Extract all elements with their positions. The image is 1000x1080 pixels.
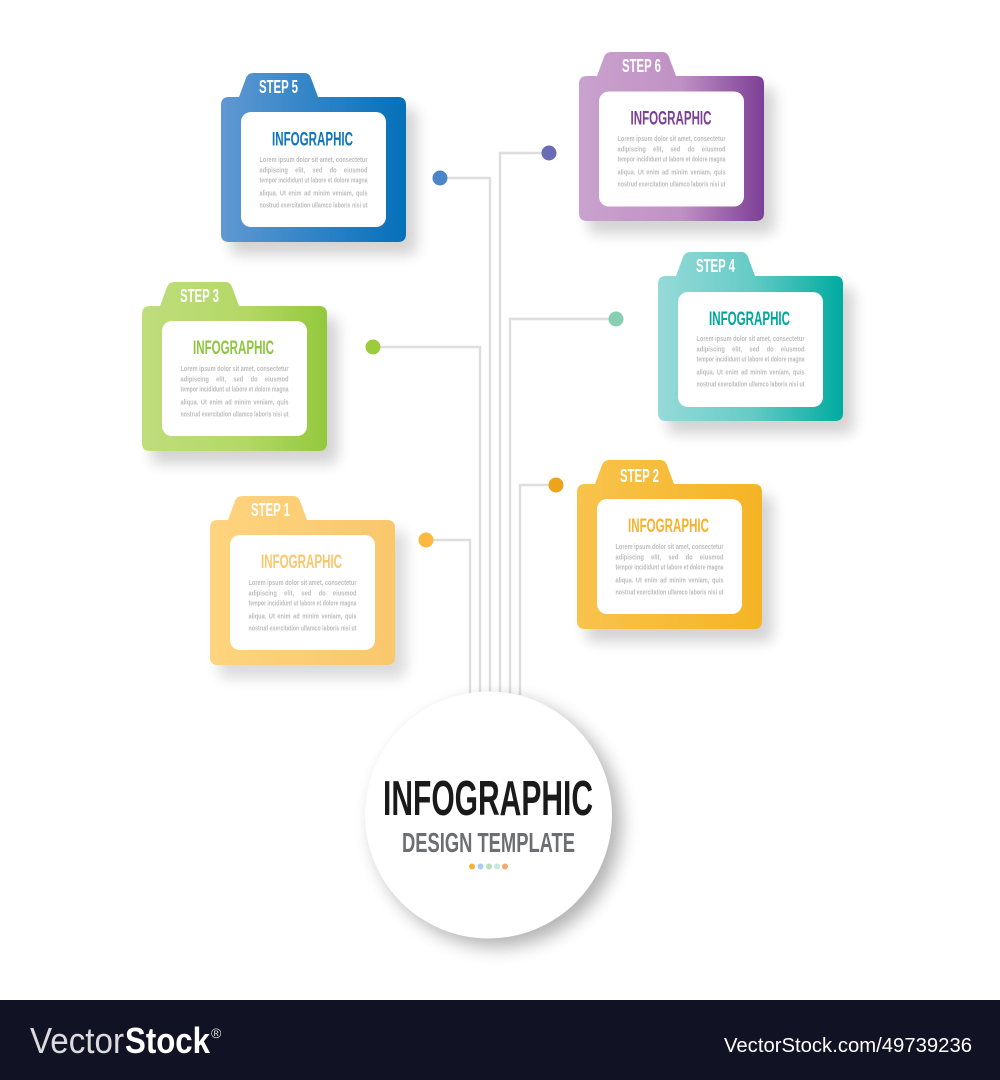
body text bbox=[180, 366, 289, 418]
footer logo: Vector bbox=[30, 1020, 124, 1061]
panel: step 6 bbox=[579, 52, 775, 234]
panel: step 4 bbox=[658, 252, 854, 434]
body text: adipiscing elit, sed do eiusmod bbox=[618, 146, 726, 154]
tab label: STEP 3 bbox=[180, 286, 219, 306]
heading: INFOGRAPHIC bbox=[628, 516, 709, 537]
panel: step 2 bbox=[577, 460, 773, 642]
tab label: STEP 2 bbox=[620, 466, 659, 486]
body text bbox=[260, 157, 368, 210]
footer logo: Stock bbox=[125, 1020, 211, 1061]
tab label: STEP 4 bbox=[696, 256, 735, 276]
footer logo: ® bbox=[211, 1025, 222, 1041]
connector: step 1 bbox=[418, 532, 470, 695]
body text bbox=[616, 544, 724, 596]
tab label: STEP 5 bbox=[259, 77, 298, 97]
body text bbox=[618, 136, 726, 188]
body text: adipiscing elit, sed do eiusmod bbox=[248, 590, 356, 598]
central circle bbox=[365, 692, 621, 947]
body text: aliqua. Ut enim ad minim veniam, quis bbox=[616, 578, 724, 584]
body text: aliqua. Ut enim ad minim veniam, quis bbox=[180, 400, 289, 406]
connector: step 3 bbox=[366, 340, 480, 695]
connector: step 2 bbox=[520, 478, 564, 695]
body text: nostrud exercitation ullamco laboris nisi ut bbox=[616, 590, 724, 596]
body text: aliqua. Ut enim ad minim veniam, quis bbox=[618, 170, 726, 176]
subtitle: DESIGN TEMPLATE bbox=[402, 827, 575, 858]
body text: tempor incididunt ut labore et dolore magna bbox=[260, 178, 368, 184]
body text: nostrud exercitation ullamco laboris nisi ut bbox=[618, 182, 726, 188]
body text: nostrud exercitation ullamco laboris nisi ut bbox=[248, 626, 357, 632]
connector: step 5 bbox=[432, 170, 490, 695]
body text bbox=[248, 580, 357, 632]
footer logo bbox=[30, 1020, 222, 1061]
body text: nostrud exercitation ullamco laboris nisi ut bbox=[180, 412, 289, 418]
body text: Lorem ipsum dolor sit amet, consectetur bbox=[696, 336, 805, 343]
panel: step 5 bbox=[221, 73, 417, 255]
body text: aliqua. Ut enim ad minim veniam, quis bbox=[248, 614, 357, 620]
main title: INFOGRAPHIC bbox=[383, 772, 593, 826]
tab label: STEP 1 bbox=[251, 500, 290, 520]
body text: nostrud exercitation ullamco laboris nisi ut bbox=[696, 382, 805, 388]
body text: adipiscing elit, sed do eiusmod bbox=[180, 376, 288, 384]
heading: INFOGRAPHIC bbox=[261, 552, 342, 573]
colored dots bbox=[469, 864, 508, 870]
footer bar bbox=[0, 1000, 1000, 1080]
body text: Lorem ipsum dolor sit amet, consectetur bbox=[618, 136, 726, 143]
body text bbox=[696, 336, 805, 388]
body text: adipiscing elit, sed do eiusmod bbox=[260, 168, 368, 174]
tab label: STEP 6 bbox=[622, 56, 661, 76]
footer url: VectorStock.com/49739236 bbox=[724, 1034, 972, 1057]
body text: aliqua. Ut enim ad minim veniam, quis bbox=[260, 190, 368, 198]
heading: INFOGRAPHIC bbox=[630, 108, 712, 130]
connector: step 6 bbox=[500, 146, 556, 695]
body text: tempor incididunt ut labore et dolore magna bbox=[696, 356, 805, 364]
panel: step 1 bbox=[210, 496, 406, 678]
heading: INFOGRAPHIC bbox=[193, 338, 274, 359]
body text: tempor incididunt ut labore et dolore magna bbox=[616, 564, 724, 572]
body text: aliqua. Ut enim ad minim veniam, quis bbox=[696, 370, 805, 376]
body text: Lorem ipsum dolor sit amet, consectetur bbox=[616, 544, 724, 551]
body text: tempor incididunt ut labore et dolore magna bbox=[618, 156, 726, 164]
panel: step 3 bbox=[142, 282, 338, 464]
body text: adipiscing elit, sed do eiusmod bbox=[616, 554, 724, 562]
heading: INFOGRAPHIC bbox=[272, 130, 353, 150]
body text: Lorem ipsum dolor sit amet, consectetur bbox=[248, 580, 357, 587]
body text: tempor incididunt ut labore et dolore magna bbox=[180, 386, 289, 394]
connector: step 4 bbox=[510, 312, 624, 695]
heading: INFOGRAPHIC bbox=[709, 309, 790, 330]
body text: nostrud exercitation ullamco laboris nisi ut bbox=[260, 202, 368, 210]
body text: Lorem ipsum dolor sit amet, consectetur bbox=[180, 366, 289, 373]
body text: Lorem ipsum dolor sit amet, consectetur bbox=[260, 157, 368, 164]
body text: tempor incididunt ut labore et dolore magna bbox=[248, 600, 357, 608]
body text: adipiscing elit, sed do eiusmod bbox=[696, 346, 804, 354]
